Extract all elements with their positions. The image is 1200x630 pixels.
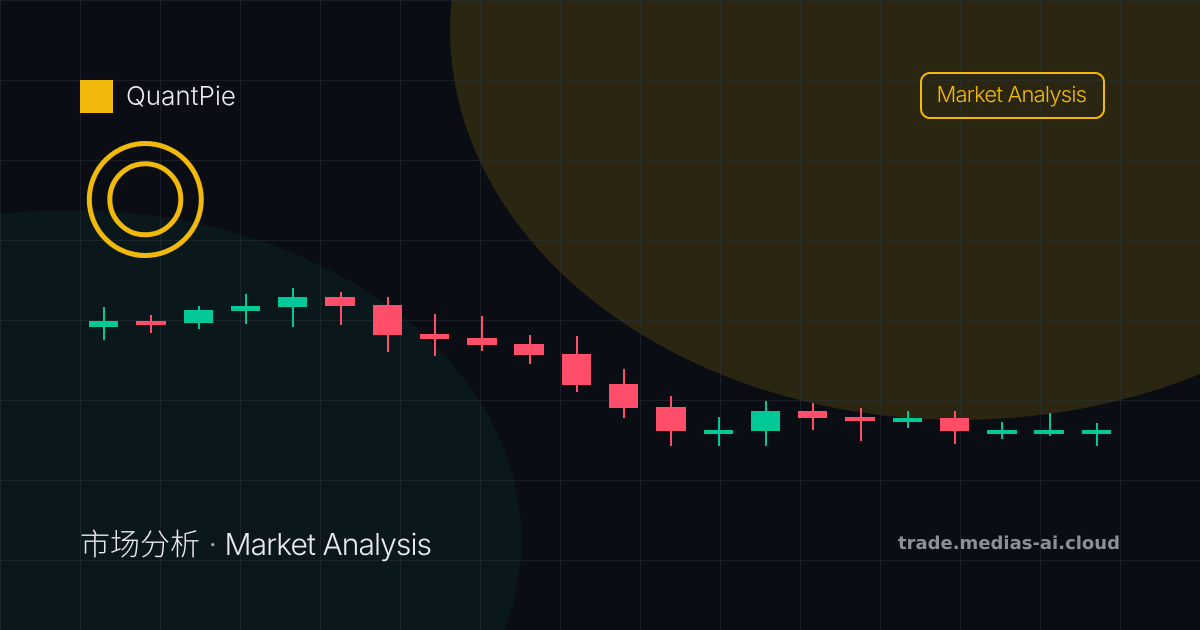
title (80, 527, 432, 563)
candlestick chart (89, 288, 1111, 446)
background glow: teal ellipse (0, 210, 522, 630)
footer url: trade.medias-ai.cloud (898, 533, 1120, 554)
title: 市场分析 (80, 527, 200, 563)
background glow: yellow ellipse (450, 0, 1200, 420)
icon: concentric rings (89, 144, 201, 256)
title: · (208, 527, 217, 563)
badge: Market Analysis: Market Analysis (936, 82, 1087, 108)
brand name: QuantPie (126, 81, 236, 112)
badge: Market Analysis (921, 73, 1104, 118)
logo square (80, 80, 113, 113)
title: Market Analysis (224, 527, 432, 563)
